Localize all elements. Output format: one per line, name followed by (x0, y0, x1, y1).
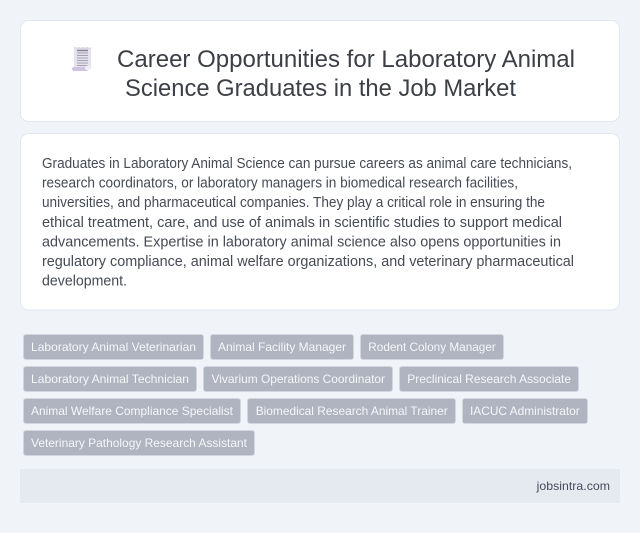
panel: header card (20, 20, 620, 122)
tag: Animal Facility Manager (210, 334, 354, 360)
tag: Laboratory Animal Veterinarian (24, 334, 204, 360)
icon: paper scroll (72, 47, 91, 71)
tag: Rodent Colony Manager (360, 334, 504, 360)
description text (42, 156, 574, 290)
tag: Laboratory Animal Technician (24, 366, 196, 392)
panel: description card (20, 134, 620, 310)
tag: Veterinary Pathology Research Assistant: Veterinary Pathology Research Assistant (31, 436, 248, 450)
tag: IACUC Administrator (462, 398, 588, 424)
tag: Preclinical Research Associate (400, 366, 578, 392)
tag: Animal Facility Manager: Animal Facility Manager (218, 340, 346, 354)
description text: universities, and pharmaceutical companies. They play a critical role in ensuring the (42, 195, 545, 211)
tag: Vivarium Operations Coordinator (204, 366, 392, 392)
title: Science Graduates in the Job Market (125, 75, 516, 102)
tag: Laboratory Animal Veterinarian: Laboratory Animal Veterinarian (31, 340, 196, 354)
tag: Vivarium Operations Coordinator: Vivarium Operations Coordinator (212, 372, 385, 386)
description text: Graduates in Laboratory Animal Science can pursue careers as animal care technicians, (42, 156, 572, 172)
footer source text: jobsintra.com (536, 479, 610, 493)
title: Career Opportunities for Laboratory Animal (117, 46, 575, 73)
description text: ethical treatment, care, and use of animals in scientific studies to support medical (42, 215, 562, 231)
tag: Biomedical Research Animal Trainer: Biomedical Research Animal Trainer (256, 404, 448, 418)
tag: Veterinary Pathology Research Assistant (24, 430, 254, 456)
footer bar (20, 469, 620, 503)
description text: development. (42, 274, 127, 290)
tag: Biomedical Research Animal Trainer (248, 398, 456, 424)
description text: research coordinators, or laboratory managers in biomedical research facilities, (42, 176, 518, 192)
tag: Laboratory Animal Technician: Laboratory Animal Technician (31, 372, 189, 386)
tag: Rodent Colony Manager: Rodent Colony Manager (368, 340, 496, 354)
tags: job titles (24, 334, 588, 456)
tag: Preclinical Research Associate: Preclinical Research Associate (407, 372, 571, 386)
description text: advancements. Expertise in laboratory animal science also opens opportunities in (42, 234, 561, 250)
tag: Animal Welfare Compliance Specialist: Animal Welfare Compliance Specialist (31, 404, 234, 418)
tag: Animal Welfare Compliance Specialist (24, 398, 240, 424)
title (117, 46, 575, 102)
tag: IACUC Administrator: IACUC Administrator (470, 404, 580, 418)
description text: regulatory compliance, animal welfare organizations, and veterinary pharmaceutical (42, 254, 574, 270)
